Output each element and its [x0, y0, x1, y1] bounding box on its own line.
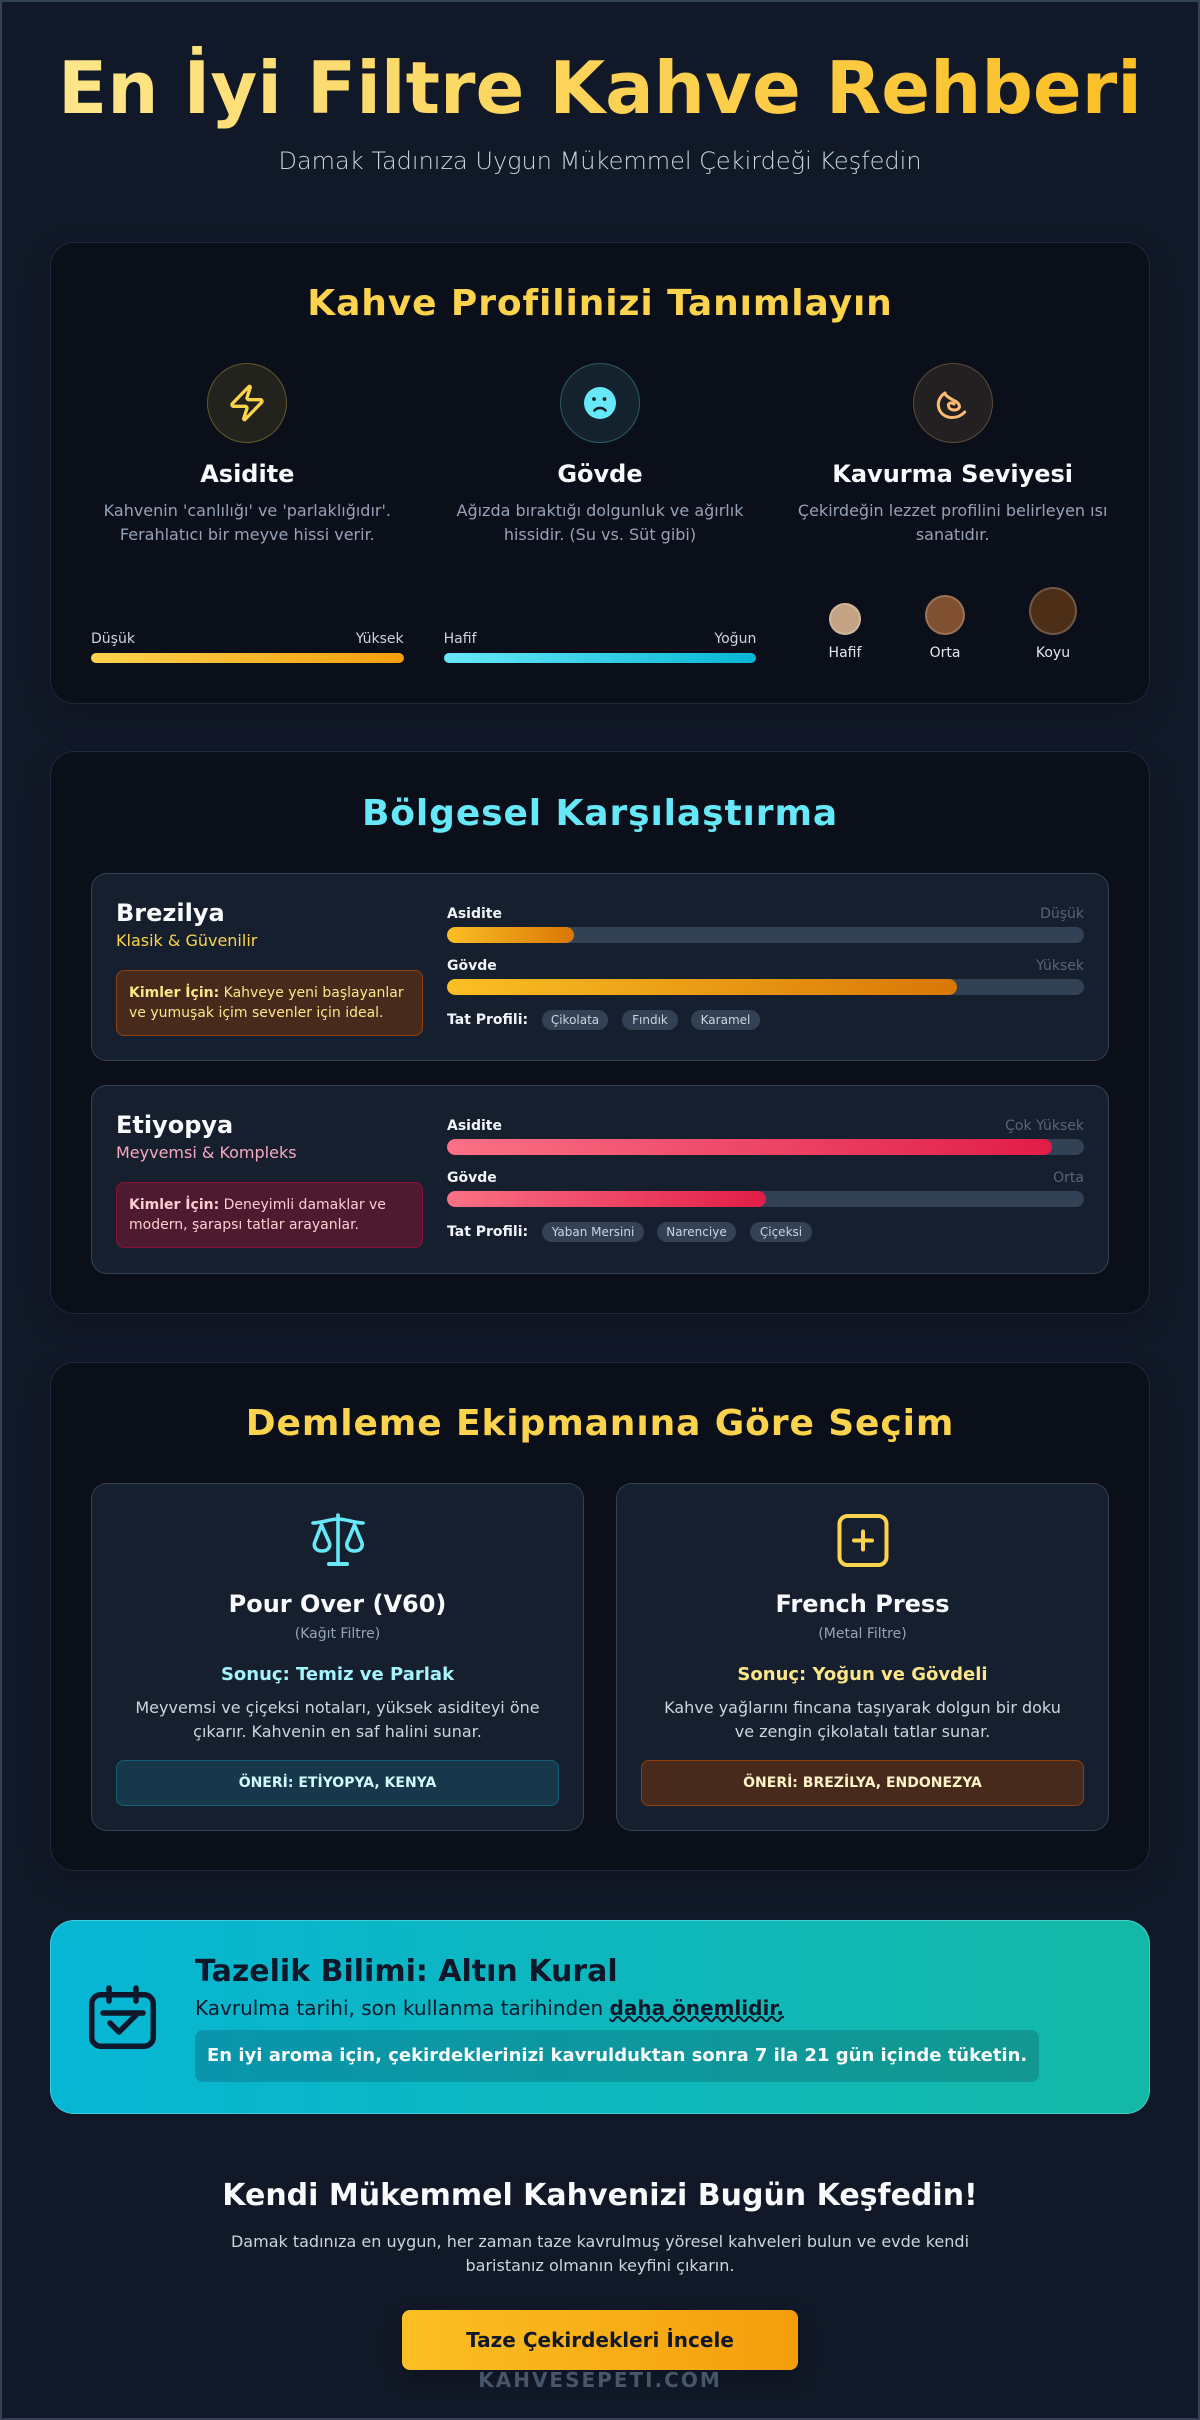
tag: [691, 1010, 760, 1030]
heading: body: Gövde: [557, 460, 643, 488]
value: very high: Çok Yüksek: [1005, 1118, 1084, 1134]
panel: regional comparison: [50, 751, 1150, 1314]
swatch: light roast: [829, 603, 861, 635]
text: french press: Kahve yağlarını fincana taşıyarak dolgun bir doku: [664, 1698, 1061, 1717]
text: roast: Çekirdeğin lezzet profilini belirleyen ısı: [798, 501, 1107, 520]
recommendation: french press: ÖNERİ: BREZİLYA, ENDONEZYA: [743, 1775, 982, 1791]
text: CTA: Damak tadınıza en uygun, her zaman taze kavrulmuş yöresel kahveleri bulun ve evde kendi: [231, 2232, 969, 2251]
tag: Çikolata: [551, 1013, 599, 1027]
icon: press: [838, 1514, 888, 1567]
title: En İyi Filtre Kahve Rehberi: [58, 46, 1142, 130]
heading: acidity: Asidite: [200, 460, 294, 488]
text: french press: [664, 1698, 1061, 1741]
swatch: medium roast: [925, 595, 965, 635]
callout: who for Brazil: [116, 970, 423, 1036]
card: french press: [616, 1483, 1109, 1831]
bar: acidity 20%: [447, 927, 1084, 943]
label: low: Düşük: [91, 631, 135, 647]
card: Ethiopia: [91, 1085, 1109, 1274]
tag: [750, 1222, 812, 1242]
highlight box: [195, 2030, 1039, 2082]
note: metal filter: (Metal Filtre): [818, 1626, 907, 1642]
text: CTA: [231, 2232, 969, 2275]
heading: regional: Bölgesel Karşılaştırma: [362, 793, 838, 834]
text: pour over: çıkarır. Kahvenin en saf halini sunar.: [193, 1722, 482, 1741]
heading: equipment: Demleme Ekipmanına Göre Seçim: [246, 1403, 954, 1444]
label: body: Gövde: [447, 958, 497, 974]
icon: lightning: [207, 363, 287, 443]
heading: pour over: Pour Over (V60): [229, 1590, 446, 1618]
button: Taze Çekirdekleri İncele: [466, 2328, 734, 2352]
heading: freshness: Tazelik Bilimi: Altın Kural: [195, 1954, 618, 1988]
button: [402, 2310, 798, 2370]
result: pour over: Sonuç: Temiz ve Parlak: [221, 1664, 454, 1685]
footer brand: KAHVESEPETI.COM: [478, 2368, 722, 2392]
label: acidity: Asidite: [447, 906, 502, 922]
label: flavour: Tat Profili:: [447, 1224, 528, 1240]
value: high: Yüksek: [1036, 958, 1084, 974]
text: pour over: [135, 1698, 540, 1741]
text: roast: sanatıdır.: [916, 525, 989, 544]
heading: roast: Kavurma Seviyesi: [832, 460, 1073, 488]
label: high: Yüksek: [356, 631, 404, 647]
note: paper filter: (Kağıt Filtre): [295, 1626, 380, 1642]
tag: [657, 1222, 736, 1242]
icon: face: [560, 363, 640, 443]
tag: [622, 1010, 678, 1030]
swatch: dark roast: [1029, 587, 1077, 635]
recommendation: french press: [641, 1760, 1084, 1806]
text: acidity: [104, 501, 391, 544]
bar: body 50%: [447, 1191, 1084, 1207]
tag: [542, 1222, 644, 1242]
label: medium roast: Orta: [930, 645, 960, 661]
recommendation: pour over: ÖNERİ: ETİYOPYA, KENYA: [239, 1775, 436, 1791]
callout: who for Brazil: ve yumuşak içim sevenler için ideal.: [129, 1005, 384, 1021]
scale bar: body: [444, 653, 756, 663]
label: heavy: Yoğun: [714, 631, 756, 647]
icon: calendar check: [89, 1985, 156, 2049]
tag: Karamel: [701, 1013, 750, 1027]
label: light: Hafif: [444, 631, 477, 647]
label: light roast: Hafif: [829, 645, 861, 661]
name: Brazil: Brezilya: [116, 899, 225, 927]
icon: scales: [311, 1513, 365, 1566]
callout: who for Brazil: Kimler İçin: Kahveye yeni başlayanlar: [129, 985, 404, 1001]
icon: flame: [913, 363, 993, 443]
recommendation: pour over: [116, 1760, 559, 1806]
highlight box: En iyi aroma için, çekirdeklerinizi kavrulduktan sonra 7 ila 21 gün içinde tüketin.: [207, 2044, 1027, 2066]
callout: who for Ethiopia: [116, 1182, 423, 1248]
tag: [542, 1010, 608, 1030]
bar: acidity 95%: [447, 1139, 1084, 1155]
text: body: Ağızda bıraktığı dolgunluk ve ağırlık: [456, 501, 743, 520]
callout: who for Ethiopia: Kimler İçin: Deneyimli damaklar ve: [129, 1197, 386, 1213]
text: freshness: Kavrulma tarihi, son kullanma tarihinden daha önemlidir.: [195, 1996, 784, 2020]
text: body: [456, 501, 744, 544]
heading: CTA: Kendi Mükemmel Kahvenizi Bugün Keşfedin!: [222, 2178, 978, 2213]
column: acidity: [91, 363, 404, 663]
heading: profile: Kahve Profilinizi Tanımlayın: [307, 283, 893, 324]
text: french press: ve zengin çikolatalı tatlar sunar.: [735, 1722, 990, 1741]
text: body: hissidir. (Su vs. Süt gibi): [504, 525, 696, 544]
card: Brazil: [91, 873, 1109, 1061]
text: acidity: Ferahlatıcı bir meyve hissi verir.: [120, 525, 375, 544]
panel: brewing equipment: [50, 1362, 1150, 1871]
tagline: Brazil: Klasik & Güvenilir: [116, 931, 257, 950]
label: body: Gövde: [447, 1170, 497, 1186]
scale bar: acidity: [91, 653, 404, 663]
subtitle: Damak Tadınıza Uygun Mükemmel Çekirdeği Keşfedin: [278, 147, 922, 175]
value: low: Düşük: [1040, 906, 1084, 922]
card: pour over: [91, 1483, 584, 1831]
name: Ethiopia: Etiyopya: [116, 1111, 233, 1139]
bar: body 80%: [447, 979, 1084, 995]
text: CTA: baristanız olmanın keyfini çıkarın.: [466, 2256, 734, 2275]
tag: Çiçeksi: [760, 1225, 802, 1239]
label: flavour: Tat Profili:: [447, 1012, 528, 1028]
text: acidity: Kahvenin 'canlılığı' ve 'parlaklığıdır'.: [104, 501, 391, 520]
heading: french press: French Press: [776, 1590, 950, 1618]
result: french press: Sonuç: Yoğun ve Gövdeli: [737, 1664, 988, 1685]
label: acidity: Asidite: [447, 1118, 502, 1134]
callout: freshness: [50, 1920, 1150, 2114]
column: body: [444, 363, 756, 663]
tag: Fındık: [632, 1013, 668, 1027]
tagline: Ethiopia: Meyvemsi & Kompleks: [116, 1143, 297, 1162]
value: medium: Orta: [1053, 1170, 1084, 1186]
tag: Yaban Mersini: [552, 1225, 634, 1239]
text: roast: [798, 501, 1107, 544]
callout: who for Ethiopia: modern, şarapsı tatlar arayanlar.: [129, 1217, 359, 1233]
tag: Narenciye: [666, 1225, 727, 1239]
column: roast: [798, 363, 1107, 661]
text: pour over: Meyvemsi ve çiçeksi notaları, yüksek asiditeyi öne: [135, 1698, 540, 1717]
label: dark roast: Koyu: [1036, 645, 1070, 661]
panel: coffee profile: [50, 242, 1150, 704]
